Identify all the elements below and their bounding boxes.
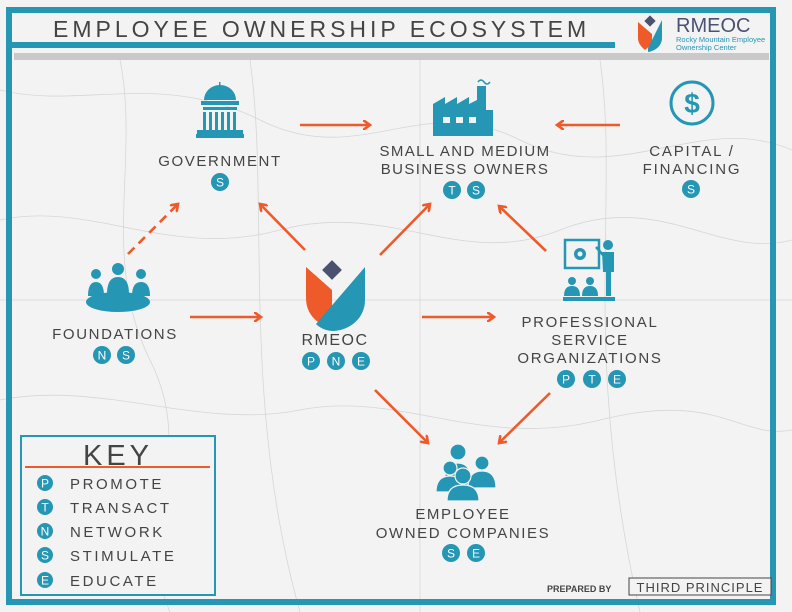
title: EMPLOYEE OWNERSHIP ECOSYSTEM xyxy=(53,16,590,42)
role badges: S xyxy=(216,176,224,190)
key panel: EDUCATE xyxy=(70,573,159,590)
label: RMEOC: RMEOC xyxy=(301,332,369,349)
key panel: STIMULATE xyxy=(70,548,176,565)
role badges: E xyxy=(357,354,365,368)
key panel: KEY xyxy=(83,440,153,472)
role badges: S xyxy=(447,546,455,560)
icon: foundations xyxy=(86,263,150,312)
icon: RMEOC logo xyxy=(306,260,365,331)
key panel: N xyxy=(41,524,49,538)
role badges: T xyxy=(588,372,596,386)
credit: THIRD PRINCIPLE xyxy=(637,580,763,595)
role badges: P xyxy=(307,354,315,368)
key panel: PROMOTE xyxy=(70,476,164,493)
text: BUSINESS OWNERS xyxy=(381,161,549,178)
role badges: N xyxy=(98,348,106,362)
icon: capital: $ xyxy=(684,88,700,119)
title underline xyxy=(9,42,615,48)
credit xyxy=(547,578,771,595)
label: foundations: FOUNDATIONS xyxy=(52,326,178,343)
role badges: E xyxy=(472,546,480,560)
text: OWNED COMPANIES xyxy=(376,525,550,542)
role badges: S xyxy=(122,348,130,362)
role badges: E xyxy=(613,372,621,386)
credit: PREPARED BY xyxy=(547,584,611,594)
factory icon xyxy=(433,80,493,136)
label: SMB: SMALL AND MEDIUM xyxy=(379,143,551,160)
role badges: S xyxy=(472,184,480,198)
key panel: P xyxy=(41,476,49,490)
role badges: P xyxy=(562,372,570,386)
role badges: T xyxy=(448,184,456,198)
label: capital: CAPITAL / xyxy=(649,143,735,160)
logo: Rocky Mountain Employee xyxy=(676,35,765,44)
key panel: TRANSACT xyxy=(70,500,172,517)
key panel xyxy=(21,436,215,595)
role badges xyxy=(93,173,700,562)
role badges: S xyxy=(687,182,695,196)
text: ORGANIZATIONS xyxy=(517,350,663,367)
key panel: E xyxy=(41,574,49,588)
label: government: GOVERNMENT xyxy=(158,153,282,170)
logo xyxy=(638,15,765,52)
key panel: NETWORK xyxy=(70,524,165,541)
label: employees: EMPLOYEE xyxy=(415,506,511,523)
text: SERVICE xyxy=(551,332,629,349)
icon: government xyxy=(196,82,244,138)
arrows xyxy=(128,125,620,443)
icon: professional xyxy=(563,240,615,301)
icon: capital xyxy=(671,82,713,124)
key panel: T xyxy=(41,500,49,514)
role badges: N xyxy=(332,354,340,368)
logo: Ownership Center xyxy=(676,43,737,52)
logo: RMEOC xyxy=(676,15,750,37)
label: professional: PROFESSIONAL xyxy=(521,314,659,331)
key panel: S xyxy=(41,548,49,562)
icon: employees xyxy=(436,444,496,501)
text: FINANCING xyxy=(643,161,741,178)
